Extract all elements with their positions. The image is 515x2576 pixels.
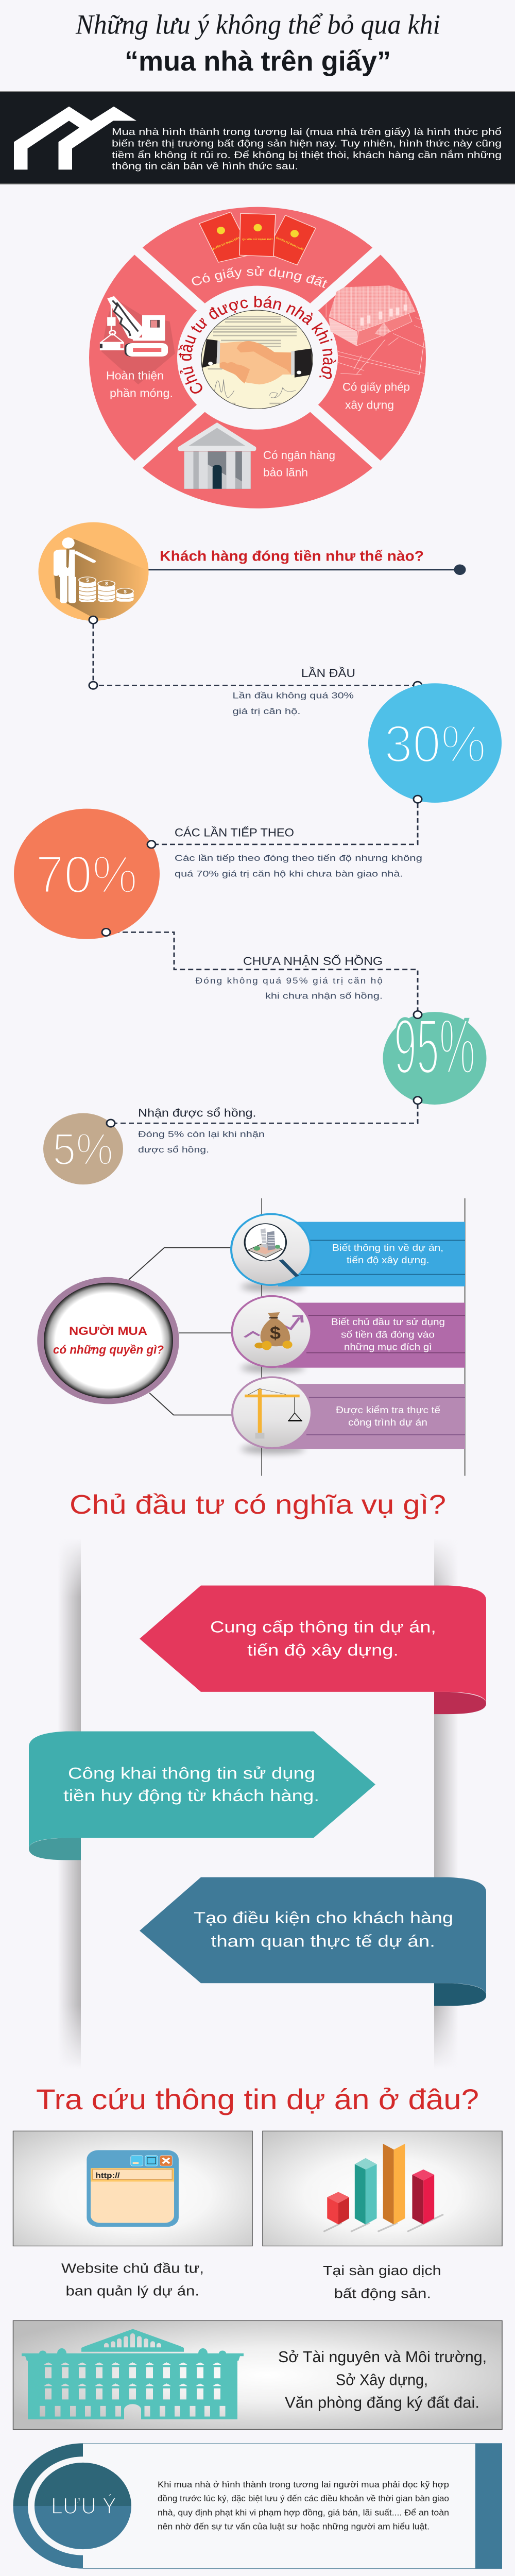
label: construction permit: Có giấy phép [342,381,410,394]
node dots [89,616,422,689]
card: website [13,2131,252,2298]
label: construction permit [342,381,410,412]
icon: house blueprint [326,285,424,375]
icon: government building [22,2329,244,2419]
central circle: có những quyền gì? [53,1344,164,1357]
icon: man with coin stacks: $ [105,582,109,587]
intro text: thông tin căn bản về hình thức sau. [112,161,298,172]
text: government offices: Sở Tài nguyên và Môi trường, [278,2348,487,2365]
central circle [37,1277,179,1404]
connector lines [129,1248,233,1415]
panel: where to look up project info [13,2084,502,2430]
note text: nhà, quy định phạt khi vi phạm hợp đồng, giá bán, lãi suất.... Để an toàn [158,2507,449,2517]
icon: handshake on contract [201,310,313,409]
step: before pink book: Đóng không quá 95% giá trị căn hộ [196,976,383,986]
caption: exchange [323,2263,441,2301]
icon: magnifier over building [231,1214,311,1285]
card: real estate exchange [263,2131,502,2301]
right 2: use of funds [232,1296,465,1372]
step: first payment: giá trị căn hộ. [233,706,301,716]
step: next payments: Các lần tiếp theo đóng theo tiến độ nhưng không [175,853,422,863]
step: next payments: quá 70% giá trị căn hộ khi chưa bàn giao nhà. [175,869,403,878]
step: next payments [14,809,422,939]
icon: browser window: http:// [96,2171,120,2180]
icon: bank [178,422,256,489]
ribbon 3: Tạo điều kiện cho khách hàng [194,1909,453,1927]
ring of four segments [89,207,426,509]
5% circle [43,1113,123,1184]
ribbon 1: tiến độ xây dựng. [247,1641,399,1659]
caption: website [61,2261,204,2298]
30% circle [368,683,502,803]
icon: man with coin stacks: $ [86,578,90,583]
text: government offices [278,2348,487,2411]
right 2: use of funds: Biết chủ đầu tư sử dụng [331,1317,445,1328]
step: after pink book: Nhận được sổ hồng. [138,1107,256,1120]
panel: developer obligations [29,1489,486,2069]
label: bank guarantee [263,449,335,479]
icon: red land-use certificates: QUYỀN SỬ DỤNG ĐẤT [211,236,241,251]
icon: money bag: $ [270,1323,281,1343]
right 1: project info [231,1214,465,1292]
frame rules [261,1198,466,1476]
intro text: biến trên thị trường bất động sản hiện nay. Tuy nhiên, hình thức này cũng [112,138,502,149]
central circle: NGƯỜI MUA [69,1324,147,1337]
heading: where to look up: Tra cứu thông tin dự án ở đâu? [36,2084,479,2115]
book 2 [239,213,276,257]
label: finished foundation [106,369,173,400]
ribbon 1 [140,1585,486,1714]
step: before pink book: khi chưa nhận sổ hồng. [265,991,383,1001]
right 3: site inspection: công trình dự án [348,1417,427,1428]
ribbon 3: tham quan thực tế dự án. [211,1933,435,1951]
icon: red land-use certificates: QUYỀN SỬ DỤNG ĐẤT [242,238,273,241]
title line 2: “mua nhà trên giấy” [125,46,391,77]
note text: đồng trước lúc ký, đặc biệt lưu ý đến các điều khoản về thời gian bàn giao [158,2494,449,2503]
book 1 [199,212,252,262]
ribbon 2 [29,1732,375,1860]
note frame [13,2443,502,2569]
right 3: site inspection: Được kiểm tra thực tế [336,1405,440,1416]
note text: nên nhờ đến sự tư vấn của luật sư hoặc những người am hiểu luật. [158,2521,430,2531]
curved heading: Chủ đầu tư được bán nhà khi nào? [178,296,336,394]
icon: red land-use certificates: QUYỀN SỬ DỤNG ĐẤT [275,236,305,251]
end dot [454,564,466,575]
icon: house roofs [14,107,136,170]
panel: buyer rights [37,1198,466,1476]
panel: how customers pay [14,522,502,1184]
step: first payment: LẦN ĐẦU [301,666,355,680]
right 1: project info: Biết thông tin về dự án, [332,1243,443,1253]
book 3 [266,215,316,265]
caption: exchange: Tại sàn giao dịch [323,2263,441,2278]
5% circle: 5% [53,1124,113,1175]
label: bank guarantee: Có ngân hàng [263,449,335,462]
icon: money bag [232,1296,311,1367]
heading: how customers pay: Khách hàng đóng tiền như thế nào? [160,548,424,564]
70% circle: 70% [36,845,138,904]
note badge: LƯU Ý [51,2494,116,2519]
step: before pink book [196,954,487,1105]
card: government offices [13,2320,502,2430]
text: government offices: Sở Xây dựng, [336,2371,428,2388]
icon: browser window [87,2150,179,2227]
ribbon 2: tiền huy động từ khách hàng. [63,1787,319,1805]
70% circle [14,809,160,939]
icon: man with coin stacks: $ [124,589,127,595]
text: government offices: Văn phòng đăng ký đất đai. [285,2394,479,2411]
right 1: project info: tiến độ xây dựng. [347,1255,430,1266]
intro panel [0,91,515,184]
heading: obligations: Chủ đầu tư có nghĩa vụ gì? [70,1489,446,1519]
note text [158,2480,449,2531]
icon: man with coin stacks [38,522,151,622]
intro text [112,127,502,172]
intro text: tiềm ẩn không ít rủi ro. Để không bị thiệt thòi, khách hàng cần nắm những [112,149,502,161]
step: first payment: Lần đầu không quá 30% [233,690,354,700]
label: construction permit: xây dựng [345,399,394,412]
step: after pink book [43,1107,265,1184]
label: bank guarantee: bảo lãnh [263,467,308,479]
label: land-use certificate: Có giấy sử dụng đất [192,266,328,289]
connector lines [93,570,460,1123]
label: finished foundation: Hoàn thiện [106,369,164,382]
step: first payment [233,666,502,803]
95% circle [383,1003,486,1105]
icon: 3D bar chart [323,2144,443,2232]
right 2: use of funds: số tiền đã đóng vào [341,1330,435,1340]
caption: exchange: bất động sản. [334,2286,431,2301]
caption: website: ban quản lý dự án. [66,2283,199,2298]
right 3: site inspection [232,1377,465,1454]
label: finished foundation: phần móng. [110,387,173,400]
panel: note [13,2443,502,2569]
step: before pink book: CHƯA NHẬN SỔ HỒNG [243,954,383,968]
note text: Khi mua nhà ở hình thành trong tương lai người mua phải đọc kỹ hợp [158,2480,449,2489]
ribbon 3 [140,1877,486,2006]
icon: crane [100,296,175,384]
right 2: use of funds: những mục đích gì [344,1342,432,1352]
icon: red land-use certificates [199,212,316,265]
caption: website: Website chủ đầu tư, [61,2261,204,2276]
30% circle: 30% [384,714,486,773]
note badge [35,2463,131,2549]
title [75,9,440,77]
step: next payments: CÁC LẦN TIẾP THEO [175,826,294,839]
ribbon 2: Công khai thông tin sử dụng [68,1765,315,1783]
column shadows [58,1538,458,2069]
icon: tower crane [232,1377,312,1448]
step: after pink book: Đóng 5% còn lại khi nhận [138,1129,265,1139]
ribbon 1: Cung cấp thông tin dự án, [210,1618,436,1636]
panel: when can the developer sell [89,207,426,509]
intro text: Mua nhà hình thành trong tương lai (mua nhà trên giấy) là hình thức phổ [112,127,502,138]
title line 1: Những lưu ý không thể bỏ qua khi [75,9,440,40]
step: after pink book: được sổ hồng. [138,1145,209,1155]
